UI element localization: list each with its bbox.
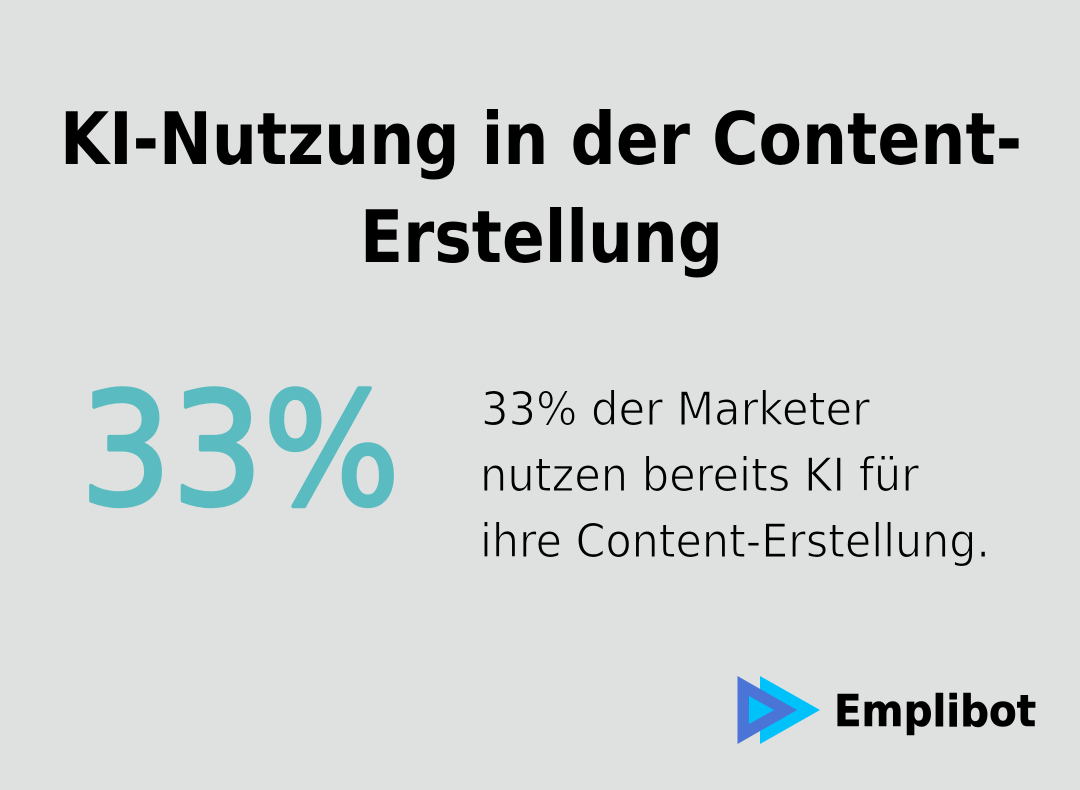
description text: nutzen bereits KI für [480, 448, 919, 502]
title: Erstellung [360, 195, 723, 279]
icon: play triangles [738, 676, 820, 744]
description text: 33% der Marketer [481, 382, 870, 436]
logo wordmark: Emplibot [834, 686, 1036, 737]
logo: Emplibot [738, 676, 1036, 744]
title [60, 97, 1022, 279]
description text: ihre Content-Erstellung. [480, 514, 990, 568]
description text [480, 382, 990, 568]
big statistic: 33%: 33% [80, 359, 400, 541]
